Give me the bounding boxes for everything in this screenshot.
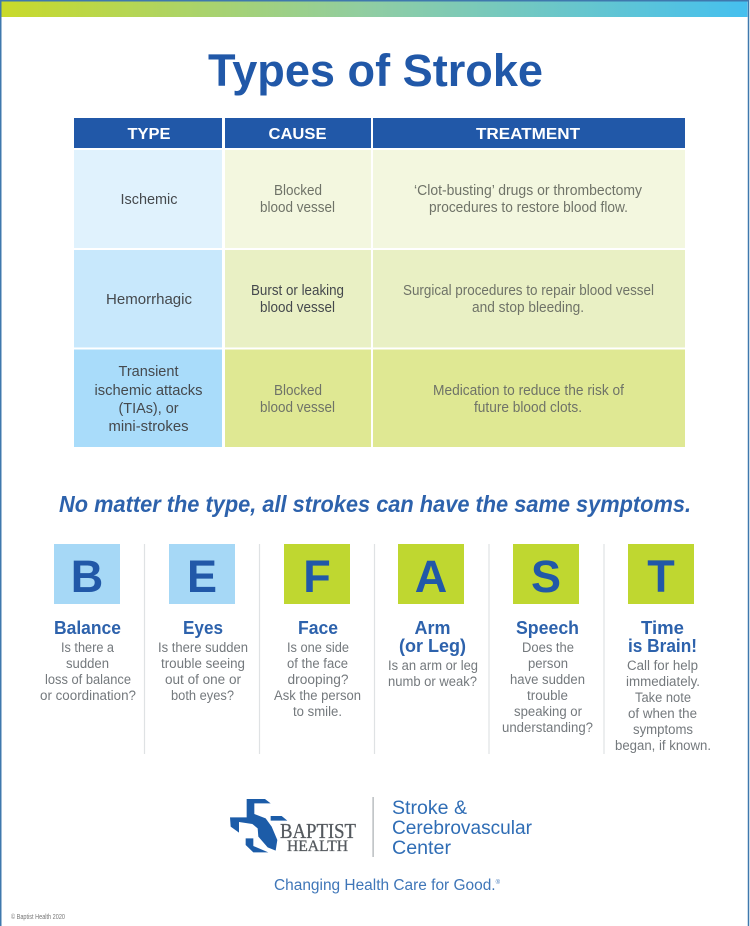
table header: TREATMENT	[476, 126, 580, 143]
row: hemorrhagic: and stop bleeding.	[472, 300, 584, 316]
panel: T time is brain: Time	[641, 617, 684, 638]
row: transient ischemic attacks: mini-strokes	[108, 419, 188, 435]
table header: CAUSE	[268, 126, 327, 143]
row: ischemic: ‘Clot-busting’ drugs or thrombectomy	[414, 183, 643, 199]
panel: T time is brain: T	[647, 551, 675, 602]
panel: E eyes: Is there sudden	[158, 640, 248, 655]
panel: B balance: loss of balance	[45, 672, 131, 687]
row: transient ischemic attacks: blood vessel	[260, 400, 335, 416]
row: transient ischemic attacks: Medication to reduce the risk of	[433, 383, 625, 399]
panel: S speech: understanding?	[502, 720, 593, 735]
center name: Stroke &	[392, 798, 467, 819]
panel: S speech	[502, 544, 593, 735]
panel: T time is brain	[615, 544, 711, 753]
row: transient ischemic attacks: Blocked	[274, 383, 322, 399]
panel: F face: Face	[298, 617, 338, 638]
panel: S speech: S	[531, 551, 561, 602]
panel: E eyes: trouble seeing	[161, 656, 245, 671]
icon: cross and Florida	[230, 799, 287, 852]
panel: F face: of the face	[287, 656, 348, 671]
panel: F face	[274, 544, 361, 719]
panel: B balance	[40, 544, 136, 703]
table header: TYPE	[128, 126, 171, 143]
panel: T time is brain: is Brain!	[628, 635, 697, 656]
center name: Cerebrovascular	[392, 818, 533, 839]
panel: S speech: person	[528, 656, 568, 671]
panel: A arm or leg: Arm	[414, 617, 450, 638]
panel: A arm or leg: Is an arm or leg	[388, 658, 478, 673]
panel: T time is brain: symptoms	[633, 722, 693, 737]
panel: B balance: Balance	[54, 617, 121, 638]
panel: S speech: speaking or	[514, 704, 582, 719]
panel: S speech: Does the	[522, 640, 574, 655]
row: ischemic	[74, 150, 685, 248]
center name	[392, 798, 533, 859]
panel: E eyes	[158, 544, 248, 703]
tagline: Changing Health Care for Good.	[274, 877, 496, 894]
panel: E eyes: E	[187, 551, 217, 602]
row: hemorrhagic: Burst or leaking	[251, 283, 344, 299]
row: ischemic: Blocked	[274, 183, 322, 199]
table: stroke types	[74, 118, 685, 447]
row: hemorrhagic: blood vessel	[260, 300, 335, 316]
tagline: ®	[496, 879, 501, 886]
panel: F face: to smile.	[293, 704, 342, 719]
panel: T time is brain: immediately.	[626, 674, 700, 689]
logo divider	[372, 797, 374, 857]
panel: B balance: or coordination?	[40, 688, 136, 703]
subheading: No matter the type, all strokes can have the same symptoms.	[59, 491, 691, 517]
row: ischemic: blood vessel	[260, 200, 335, 216]
copyright: © Baptist Health 2020	[11, 913, 65, 921]
row: ischemic: Ischemic	[120, 192, 178, 208]
title: Types of Stroke	[208, 45, 543, 96]
row: ischemic: procedures to restore blood flow.	[429, 200, 628, 216]
panel: B balance: sudden	[66, 656, 109, 671]
panel: E eyes: Eyes	[183, 617, 223, 638]
logo: Baptist Health: HEALTH	[287, 838, 348, 855]
panel: F face: Is one side	[287, 640, 349, 655]
panel: S speech: have sudden	[510, 672, 585, 687]
panel: A arm or leg: (or Leg)	[399, 635, 466, 656]
row: hemorrhagic	[74, 250, 685, 348]
row: hemorrhagic: Hemorrhagic	[106, 292, 192, 308]
logo: Baptist Health: BAPTIST	[280, 819, 356, 843]
logo: Baptist Health	[230, 799, 356, 855]
row: hemorrhagic: Surgical procedures to repair blood vessel	[403, 283, 654, 299]
panel: S speech: trouble	[527, 688, 568, 703]
panel: E eyes: out of one or	[165, 672, 241, 687]
panel: B balance: B	[71, 551, 103, 602]
row: transient ischemic attacks: (TIAs), or	[118, 401, 179, 417]
panel: S speech: Speech	[516, 617, 579, 638]
table header	[74, 118, 685, 148]
panel: T time is brain: Call for help	[627, 658, 698, 673]
row: transient ischemic attacks: future blood clots.	[474, 400, 582, 416]
center name: Center	[392, 838, 452, 859]
panel: A arm or leg: A	[415, 551, 447, 602]
panel: T time is brain: began, if known.	[615, 738, 711, 753]
row: transient ischemic attacks	[74, 350, 685, 447]
panel: E eyes: both eyes?	[171, 688, 234, 703]
column dividers	[144, 544, 604, 754]
top gradient band	[2, 2, 748, 17]
panel: F face: drooping?	[288, 672, 348, 687]
panel: B balance: Is there a	[61, 640, 114, 655]
panel: A arm or leg	[388, 544, 478, 689]
panel: A arm or leg: numb or weak?	[388, 674, 477, 689]
row: transient ischemic attacks: Transient	[118, 364, 178, 380]
row: transient ischemic attacks: ischemic attacks	[94, 383, 202, 399]
panel: F face: F	[303, 551, 331, 602]
panel: F face: Ask the person	[274, 688, 361, 703]
panel: T time is brain: Take note	[635, 690, 691, 705]
panel: T time is brain: of when the	[628, 706, 697, 721]
